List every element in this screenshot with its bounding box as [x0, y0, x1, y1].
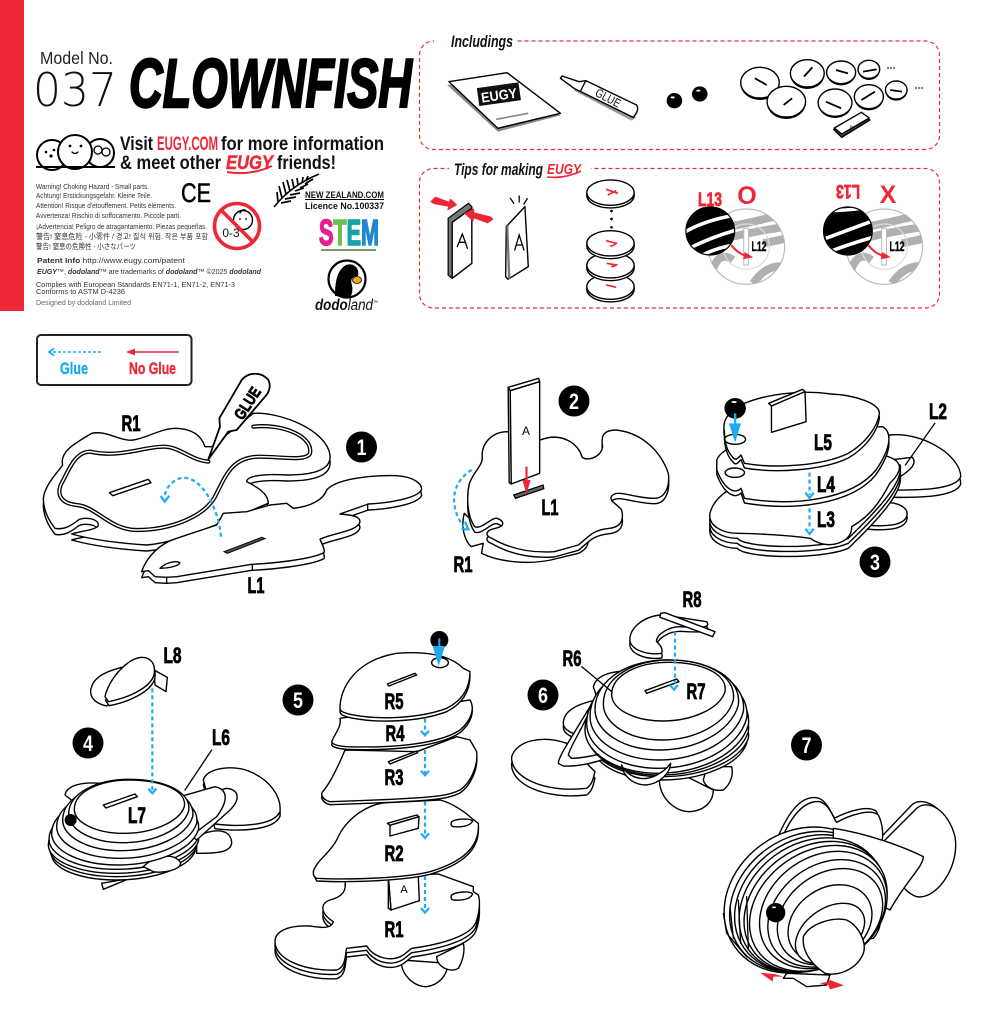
patent and compliance text: Complies with European Standards EN71-1, EN71-2, EN71-3	[36, 280, 235, 289]
tip labels	[698, 180, 905, 254]
warning text: 警告! 窒息危险 - 小零件 / 경고! 질식 위험. 작은 부품 포함	[36, 231, 208, 241]
part R5	[340, 653, 470, 721]
step 3	[710, 389, 961, 578]
dorsal fins	[775, 798, 881, 845]
step 5: A	[400, 884, 408, 896]
step 3: L4	[817, 472, 836, 497]
layer L4	[717, 427, 889, 506]
step 1: L1	[248, 573, 264, 598]
step number 2: 2	[569, 389, 579, 414]
bottom fin	[860, 913, 880, 940]
STEM logo: STEM	[319, 212, 379, 253]
visit eugy text: for more information	[221, 134, 384, 155]
labels on parts: GLUE	[593, 85, 623, 111]
more parts dots	[887, 67, 923, 89]
warning text	[36, 182, 208, 251]
step number 2	[558, 386, 590, 416]
dodoland logo	[315, 260, 378, 314]
CE mark: CE	[181, 178, 211, 208]
step number 1	[346, 432, 377, 462]
title: CLOWNFISH	[129, 45, 413, 122]
layer discs	[741, 60, 907, 137]
booklet logo: EUGY	[480, 85, 519, 106]
part R1	[275, 874, 479, 987]
warning text: Achtung! Erstickungsgefahr. Kleine Teile.	[36, 191, 152, 200]
step number 1: 1	[356, 435, 366, 460]
step number 4: 4	[83, 731, 94, 756]
tip labels: L12	[890, 238, 905, 254]
step 2: L1	[542, 495, 558, 520]
tip labels: L13	[698, 190, 722, 211]
warning text: ¡Advertencia! Peligro de atragantamiento. Piezas pequeñas.	[36, 222, 207, 231]
patent and compliance text	[36, 256, 261, 307]
icon: not for ages 0-3	[214, 204, 260, 248]
glue bottle	[208, 374, 270, 459]
patent and compliance text: Designed by dodoland Limited	[36, 298, 131, 307]
assembled clownfish	[696, 797, 956, 1003]
body layers	[696, 797, 908, 1003]
panel on L5	[769, 389, 806, 432]
leader line R6	[582, 667, 612, 692]
panel A	[508, 378, 540, 484]
included parts	[447, 60, 907, 137]
leader line L6	[185, 750, 212, 790]
part R1	[43, 413, 330, 551]
fins	[512, 671, 732, 812]
glue arrow	[148, 688, 156, 793]
legend: Glue	[60, 359, 88, 378]
step number 4	[72, 728, 104, 758]
step number 3: 3	[870, 550, 880, 575]
step 4: L8	[164, 643, 182, 668]
step number 3	[860, 546, 890, 578]
new zealand licence	[305, 190, 384, 211]
step 5: R5	[384, 689, 404, 714]
visit eugy text	[120, 134, 384, 174]
part L8	[91, 657, 167, 706]
lower layers L1-L2	[710, 465, 901, 556]
icon: eugy friends	[36, 135, 115, 170]
legend: No Glue	[129, 359, 176, 378]
panel: tips for making eugy	[420, 161, 940, 308]
step 6: R8	[682, 587, 702, 612]
patent and compliance text: EUGY™, dodoland™ are trademarks of dodoland™ ©2025 dodoland	[37, 267, 261, 276]
icon: not for ages 0-3: 0-3	[222, 226, 240, 240]
step number 5	[282, 684, 314, 716]
glue tube	[560, 76, 638, 121]
legend	[37, 335, 192, 385]
part R8	[630, 613, 715, 658]
warning text: 警告! 窒息の危険性 - 小さなパーツ	[36, 241, 136, 251]
glue arrow	[454, 470, 472, 529]
part A label: A	[848, 124, 856, 133]
warning text: Avvertenza! Rischio di soffocamento. Piccole parti.	[36, 211, 181, 220]
visit eugy text: EUGY.COM	[157, 134, 218, 155]
step 7	[696, 730, 956, 1003]
visit eugy text: Visit	[120, 134, 154, 155]
tip: wrong orientation	[823, 207, 926, 284]
no glue arrow	[126, 348, 179, 356]
heading: tips: EUGY	[547, 161, 583, 178]
part L1	[142, 476, 422, 583]
tip: correct orientation	[686, 207, 787, 284]
part R2	[313, 800, 478, 882]
panel A	[388, 877, 419, 910]
part L1	[468, 430, 669, 557]
visit eugy text: EUGY	[226, 153, 275, 174]
step 6: R6	[562, 646, 582, 671]
step 5	[275, 631, 479, 987]
step 2	[454, 378, 669, 577]
leader line L2	[905, 423, 935, 465]
tip labels: X	[880, 181, 897, 209]
step 6: R7	[686, 679, 706, 704]
tip: press panel	[430, 196, 528, 279]
dodoland logo: dodoland	[315, 297, 374, 314]
dodoland logo: ™	[373, 300, 378, 306]
stacked layers	[48, 779, 237, 880]
part R3	[322, 737, 477, 805]
no glue arrow	[522, 467, 531, 494]
step 5: R3	[384, 765, 404, 790]
step 6	[512, 587, 749, 812]
layer L5	[724, 392, 879, 471]
step 4	[48, 643, 280, 889]
glue direction arrow	[161, 478, 221, 537]
step 3: L3	[817, 507, 835, 532]
step 3: L5	[814, 430, 832, 455]
step number 7	[791, 730, 822, 760]
tip: stacking order	[587, 180, 634, 302]
eye ball	[430, 631, 448, 666]
tail	[880, 802, 953, 895]
step 1: R1	[122, 411, 140, 436]
tip labels: L12	[752, 238, 767, 254]
model number: Model No.	[40, 48, 113, 68]
glue track	[59, 426, 310, 530]
layer L3	[710, 455, 899, 545]
warning text: Warning! Choking Hazard - Small parts.	[36, 182, 149, 191]
glue arrows	[805, 473, 814, 534]
heading: includings: Includings	[451, 33, 513, 51]
tips diagrams	[430, 180, 926, 302]
step 5: R1	[384, 917, 404, 942]
icon: silver fern	[274, 174, 319, 207]
new zealand licence: Licence No.100337	[305, 201, 384, 211]
step 4: L6	[212, 725, 230, 750]
patent and compliance text: Conforms to ASTM D-4236	[36, 287, 125, 296]
new zealand licence: NEW ZEALAND.COM	[305, 190, 384, 201]
step 1: GLUE	[232, 384, 265, 423]
step 3: L2	[929, 399, 947, 424]
eye ball	[724, 398, 746, 443]
tip labels: L13	[836, 180, 860, 201]
glue arrow	[49, 348, 101, 356]
step number 7: 7	[802, 733, 812, 758]
step 2: R1	[454, 552, 472, 577]
step number 6: 6	[538, 683, 548, 708]
booklet	[447, 73, 560, 132]
tail and fin	[65, 768, 280, 889]
part R4	[332, 700, 472, 750]
step 2: A	[522, 424, 530, 438]
part R1 under L1	[463, 513, 592, 562]
visit eugy text: friends!	[277, 153, 336, 174]
eye	[766, 903, 785, 922]
tip labels: O	[737, 182, 757, 210]
patent and compliance text: Patent Info http://www.eugy.com/patent	[37, 256, 186, 265]
heading: tips: Tips for making	[454, 161, 543, 179]
face	[803, 919, 864, 974]
glue arrows	[421, 719, 429, 913]
visit eugy text: & meet other	[120, 153, 222, 174]
stacked layers	[558, 660, 749, 785]
red arrows	[760, 973, 844, 989]
step 4: L7	[128, 803, 146, 828]
eyes	[667, 86, 708, 108]
step number 6	[528, 680, 558, 710]
step 5: R2	[384, 841, 404, 866]
model number: 037	[33, 63, 117, 117]
tail and fin	[848, 435, 961, 530]
panel: includings	[420, 33, 940, 150]
step number 5: 5	[293, 688, 303, 713]
warning text: Attention! Risque d'étouffement. Petits éléments.	[36, 201, 176, 210]
step 5: R4	[386, 721, 405, 746]
step 1	[43, 374, 422, 598]
glue arrow	[670, 632, 678, 690]
red side band	[0, 0, 24, 311]
